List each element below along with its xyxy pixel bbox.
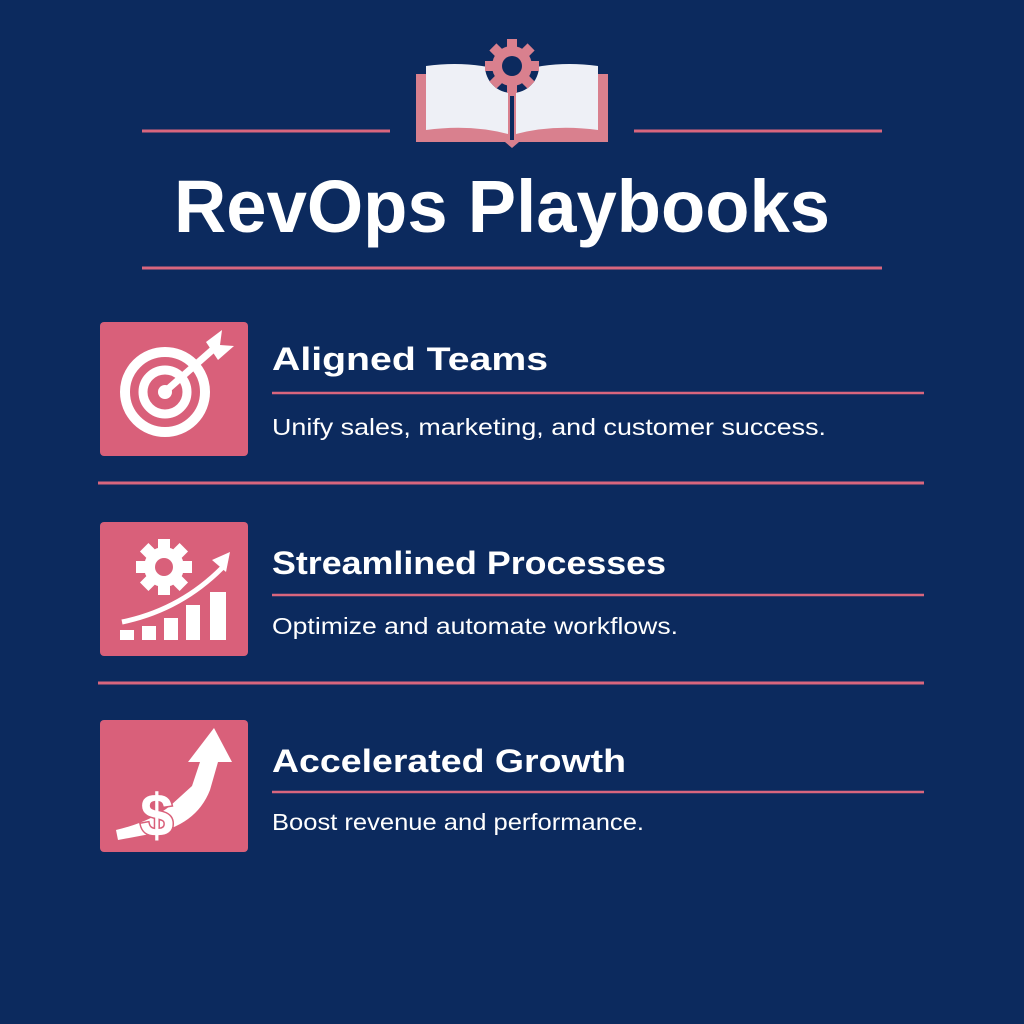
title: RevOps Playbooks [174, 165, 830, 248]
heading: Accelerated Growth [272, 743, 626, 779]
heading: Aligned Teams [272, 341, 548, 377]
panel: aligned teams [100, 322, 924, 456]
description: Optimize and automate workflows. [272, 613, 678, 639]
description: Unify sales, marketing, and customer success. [272, 414, 826, 440]
icon: target [100, 322, 248, 456]
icon: dollar with arrow [100, 720, 248, 852]
description: Boost revenue and performance. [272, 809, 644, 835]
icon: book with gear [416, 39, 608, 148]
title decorative lines [142, 131, 882, 268]
panel: accelerated growth [100, 720, 924, 852]
heading: Streamlined Processes [272, 545, 666, 581]
icon: gear with growth chart [100, 522, 248, 656]
panel: streamlined processes [100, 522, 924, 656]
icon: dollar with arrow: $ [140, 782, 173, 849]
